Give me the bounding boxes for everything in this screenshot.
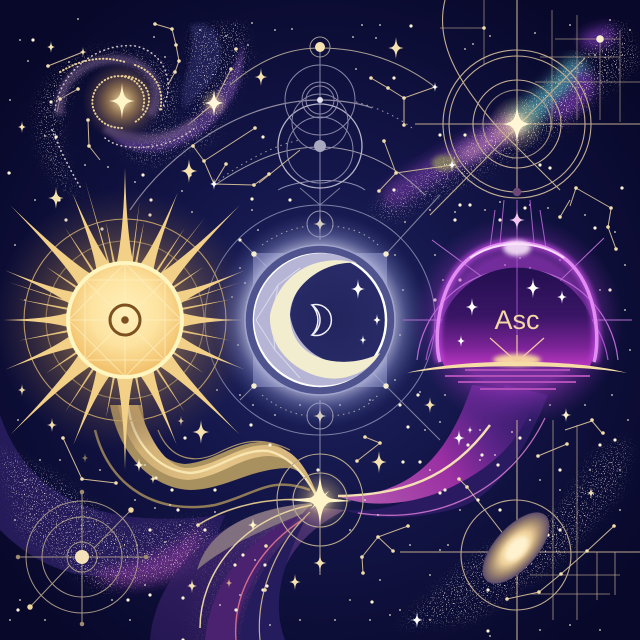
star body — [301, 474, 339, 526]
asc vertical rays — [490, 200, 546, 248]
star: ribbon small — [134, 458, 144, 472]
asc glow — [411, 216, 623, 428]
moon stars — [351, 279, 381, 345]
asc horizon glow — [493, 354, 541, 366]
star: right constellation — [431, 82, 439, 92]
lower small ring — [307, 403, 333, 429]
star: lavender — [587, 487, 595, 499]
ring around top node — [310, 37, 330, 57]
ring outer — [26, 501, 138, 613]
ring — [461, 500, 571, 610]
milky way: top right corner purple — [560, 35, 606, 110]
moon — [212, 212, 428, 428]
ribbon: tan translucent wedge — [197, 503, 312, 570]
asc crossing rays — [403, 238, 632, 320]
moon cream crescent — [270, 260, 380, 379]
asc centre axis — [516, 250, 518, 362]
sun disc geometry — [68, 263, 182, 377]
ribbon: lower gold arc — [259, 512, 310, 640]
galaxy glow — [82, 61, 162, 141]
ring inner lower — [292, 94, 348, 150]
sun glow — [0, 188, 257, 452]
star: milky way — [448, 159, 456, 171]
top right star — [489, 35, 604, 196]
centre body — [75, 550, 89, 564]
gold ribbon lower line — [95, 430, 310, 507]
constellation paths — [48, 24, 616, 599]
star: right — [561, 408, 571, 422]
gold ribbon outer layer — [110, 405, 318, 497]
upper small ring — [307, 211, 333, 237]
ring 3 — [473, 80, 561, 168]
top right geometry — [415, 0, 640, 215]
constellation nodes — [48, 24, 616, 599]
ribbon: gold flow from sun to centre star — [95, 405, 318, 525]
star: galaxy core — [109, 83, 135, 119]
great arc top — [230, 48, 435, 87]
ribbon: lower dark stripe — [240, 520, 305, 640]
top centre geometry — [130, 37, 440, 500]
diagonal — [430, 58, 585, 215]
moon dark face — [254, 254, 386, 386]
ring 4 — [483, 90, 551, 158]
milky way: pink core — [465, 125, 512, 155]
star: upper — [255, 68, 267, 86]
axes — [18, 492, 150, 624]
milky way: top right teal — [520, 70, 575, 120]
orbit ring large — [285, 65, 355, 135]
gold ribbon highlight — [128, 405, 316, 495]
asc outer rings — [417, 269, 618, 360]
ascendant — [403, 200, 632, 428]
outer spiral haze — [60, 59, 195, 138]
star: small — [79, 47, 87, 57]
star: below sun left — [47, 418, 57, 432]
end nodes — [18, 492, 146, 624]
cream wisp to left node — [198, 499, 312, 525]
ribbon: magenta flow — [340, 385, 536, 504]
spiral arms — [60, 59, 161, 128]
nebula: lower left band — [0, 415, 225, 576]
corner node — [596, 35, 604, 43]
ring inner — [287, 117, 353, 183]
constellation lines — [48, 24, 616, 599]
orbit ring small — [302, 82, 338, 118]
ring inner — [67, 542, 97, 572]
ring outer — [277, 454, 363, 546]
cross axes — [400, 420, 640, 640]
asc reflection lines — [445, 369, 590, 390]
great arc lower — [215, 147, 425, 195]
star horizontal flare — [288, 497, 352, 503]
bottom node — [513, 188, 521, 196]
star: below centre — [314, 554, 326, 572]
bottom right orbit diagram — [400, 420, 640, 640]
ribbon: pink outer line — [358, 418, 545, 515]
centre star — [288, 470, 352, 530]
star: lower band 3 — [225, 578, 233, 588]
star: lower spiral — [18, 121, 26, 133]
star: below centre right — [289, 574, 301, 590]
horizontal grid — [530, 575, 620, 594]
star: asc below — [424, 397, 436, 413]
axis down — [319, 500, 321, 575]
moon chevron — [300, 188, 340, 205]
ribbon: lower magenta stripe — [205, 515, 300, 640]
star: left of sun — [48, 187, 64, 209]
sun disc — [68, 263, 182, 377]
ribbon: lower pink arc — [236, 518, 305, 640]
ring 2 — [449, 56, 585, 192]
gold ribbon body — [118, 405, 318, 497]
ribbon: dark lower band — [150, 505, 345, 640]
node: white — [317, 97, 323, 103]
arc lowest — [278, 181, 365, 190]
dotted arcs around moon — [262, 226, 378, 416]
ring around lower node — [278, 104, 362, 188]
milky way: top right purple — [395, 125, 510, 195]
moon square frame — [253, 253, 387, 387]
star: tail — [204, 89, 224, 117]
moon facet lines — [256, 268, 300, 378]
ring mid — [42, 517, 122, 597]
centre star rings — [277, 454, 363, 575]
asc stars — [457, 209, 567, 347]
lower right spiral galaxy — [471, 501, 561, 595]
node: cream — [315, 42, 325, 52]
moon outer ring — [245, 245, 395, 395]
orbit ring smaller — [306, 86, 334, 114]
asc dome highlight — [470, 244, 564, 258]
outer arm — [52, 46, 195, 190]
rings around star — [443, 50, 591, 198]
star body — [503, 104, 531, 144]
moon corner nodes — [254, 254, 386, 386]
moon outer circle — [205, 205, 435, 435]
star: magenta — [453, 430, 465, 446]
ribbon: lower cream arc — [200, 505, 312, 628]
asc horizon — [407, 362, 627, 373]
star: ribbon tiny — [149, 474, 157, 484]
star diagonals — [304, 484, 336, 516]
sun symbol — [110, 305, 140, 335]
star: lower band 2 — [187, 579, 197, 593]
top centre nodes — [314, 42, 326, 152]
sun rings — [24, 219, 226, 421]
lower axis — [319, 200, 321, 500]
star: small — [47, 41, 55, 53]
dotted arc middle — [356, 102, 412, 128]
dotted arc upper left — [214, 140, 300, 184]
star: upper right — [388, 37, 404, 59]
moon diagonal cross — [240, 195, 440, 440]
star: below sun right — [177, 416, 185, 426]
asc label: Asc — [494, 305, 540, 335]
star: left of sun bottom — [18, 384, 26, 396]
glow — [290, 470, 350, 530]
asc dome rim glow — [437, 243, 597, 362]
star: ribbon large — [192, 420, 210, 444]
nebula: lower left purple glow — [90, 525, 205, 585]
vertical grid — [484, 0, 620, 130]
galaxy core — [501, 532, 533, 565]
star: right of ribbon — [371, 451, 387, 473]
star: dim — [81, 453, 89, 463]
spiral galaxy — [52, 46, 195, 190]
axes — [415, 0, 640, 190]
nebula: upper left dark arm — [183, 24, 221, 110]
end nodes gold — [30, 510, 131, 607]
moon glow — [212, 212, 428, 428]
horizontal grid — [440, 28, 640, 82]
star: asc left — [467, 426, 473, 434]
ribbon: dark outer purple — [345, 385, 548, 518]
gold ribbon upper line — [158, 430, 290, 459]
great arc middle — [130, 100, 372, 210]
vertical grid — [553, 420, 615, 620]
asc dome — [438, 268, 596, 366]
star: middle upper — [180, 159, 198, 183]
star: moon top — [314, 215, 326, 233]
star: lower band — [248, 518, 258, 532]
ring inner — [293, 473, 347, 527]
star: tail glow — [200, 89, 228, 117]
sun main rays — [2, 168, 248, 470]
glow — [489, 96, 545, 152]
nebula: spiral tail — [110, 35, 243, 151]
asc top flare — [503, 240, 531, 256]
moon facets — [254, 253, 380, 386]
galaxy disc — [471, 501, 561, 595]
node: grey — [314, 140, 326, 152]
star: bottom — [411, 612, 423, 628]
diagonal spoke — [30, 510, 131, 607]
sun thin rays — [9, 180, 241, 418]
ribbon: cream streak — [338, 425, 490, 496]
sun — [0, 168, 257, 470]
star: moon bottom — [314, 407, 326, 425]
bottom left orbit diagram — [18, 492, 150, 624]
centre axis — [319, 42, 321, 215]
star: top of moon constellation — [210, 178, 218, 190]
asc dome rim — [437, 243, 597, 362]
milky way: olive tip — [432, 155, 458, 171]
asc sunrise rays — [490, 335, 544, 362]
moon glyph — [312, 304, 331, 336]
outer arc top left — [442, 0, 560, 190]
